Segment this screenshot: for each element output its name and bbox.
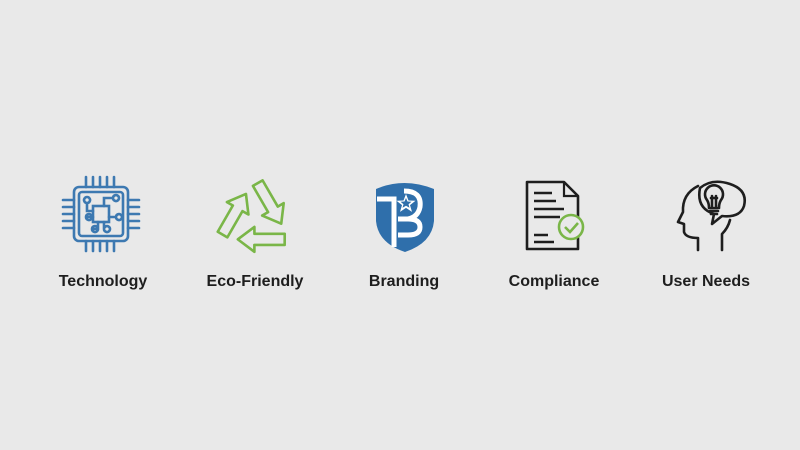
icon: technology chip — [62, 176, 140, 252]
icon: head with lightbulb — [676, 180, 746, 252]
label: User Needs: User Needs — [662, 273, 750, 290]
icon: compliance document — [526, 180, 584, 250]
icon: recycle — [216, 179, 286, 254]
label: Eco-Friendly: Eco-Friendly — [207, 273, 303, 290]
label: Compliance: Compliance — [509, 273, 599, 290]
label: Branding: Branding — [369, 273, 439, 290]
icon: branding shield — [376, 183, 434, 252]
label: Technology: Technology — [59, 273, 147, 290]
